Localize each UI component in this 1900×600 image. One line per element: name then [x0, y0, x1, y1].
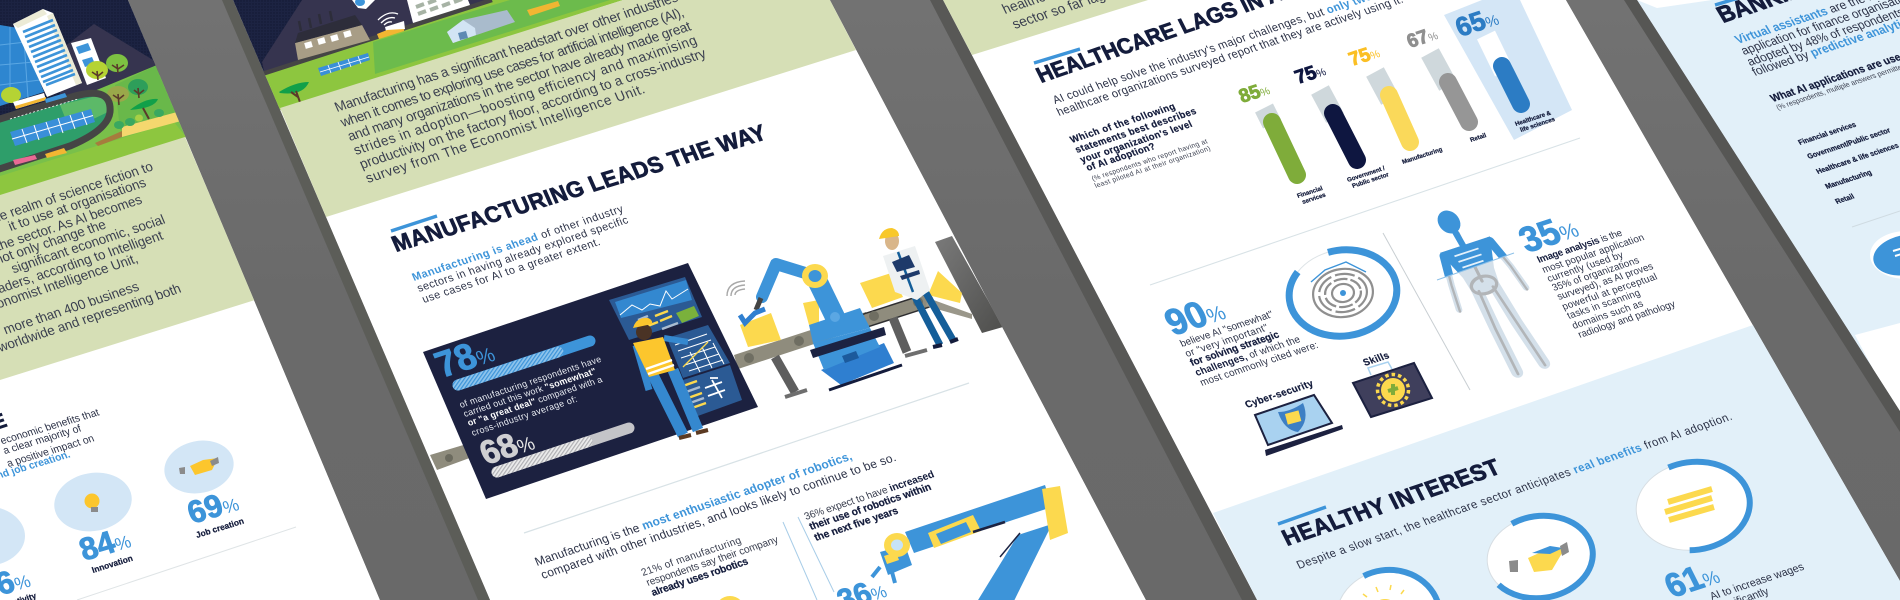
heading bar: [1278, 507, 1326, 524]
intro paragraph: survey from The Economist Intelligence Unit.: [363, 81, 647, 186]
tube: healthcare 65%: life sciences: [1519, 116, 1557, 134]
stat: innovation: Innovation: [90, 553, 134, 575]
stat 90% text: challenges, of which the: [1193, 334, 1303, 379]
night sky: [233, 0, 302, 74]
stat description: carried out this work "somewhat": [462, 366, 598, 419]
icon: laptop with shield: [1243, 378, 1343, 456]
trees: [1, 54, 164, 129]
heading bar: [391, 216, 437, 231]
grass: [262, 0, 623, 110]
stat: job creation: Job creation: [194, 516, 245, 540]
intro paragraph: productivity on the factory floor, according to a cross-industry: [357, 46, 708, 172]
heading bar: [1034, 49, 1080, 63]
robot head icon: [715, 596, 745, 600]
intro paragraph: strides in adoption—boosting efficiency and maximising: [351, 33, 699, 158]
stat 35% text: currently (used by: [1545, 250, 1625, 285]
stat 35% text: 35% of organizations: [1550, 255, 1641, 294]
tube: financial services 85%: [1236, 78, 1327, 206]
panel: sheet 4 banking: [1637, 0, 1900, 420]
grass: [0, 66, 186, 176]
intro text: Despite a slow start, the healthcare sector anticipates real benefits from AI adoption.: [1295, 411, 1734, 572]
tube: manufacturing 75%: Manufacturing: [1401, 146, 1444, 166]
pale intro band: [0, 137, 255, 380]
icon: briefcase with gear: Skills: [1361, 350, 1392, 369]
stat: job creation: 69%: [182, 482, 243, 531]
white buildings: [407, 0, 470, 23]
stat description: of manufacturing respondents have: [458, 354, 603, 410]
tree: [279, 82, 309, 102]
warehouse: [447, 10, 515, 43]
stat 90%: 90%: [1158, 288, 1231, 343]
icon: wifi: [378, 13, 398, 25]
callout: 21% use robotics: respondents say their company: [645, 534, 781, 589]
factory: [295, 11, 370, 60]
tube: financial services 85%: services: [1301, 191, 1327, 206]
test tube chart: [1236, 1, 1557, 206]
robot arm: large: [872, 485, 1068, 600]
intro paragraph: when it comes to exploring use cases for artificial intelligence (AI),: [337, 5, 686, 130]
chart question: Which of the following: [1068, 101, 1178, 146]
conveyor belt: [430, 297, 972, 470]
tube: government 75%: [1292, 59, 1391, 190]
panel: healthy interest: [1213, 325, 1900, 600]
intro paragraph: [0, 159, 183, 355]
road loop with solar farm: [0, 93, 110, 172]
sand path: [122, 112, 181, 137]
grey progress bar: [497, 428, 629, 472]
stat 35%: 35%: [1512, 206, 1584, 260]
chart note: least piloted AI at their organization): [1094, 145, 1212, 190]
icon: laptop with shield: Cyber-security: [1243, 378, 1316, 411]
night sky: [0, 0, 160, 120]
tube: government 75%: Government /: [1346, 165, 1386, 184]
tube: financial services 85%: Financial: [1296, 185, 1324, 200]
chart row labels: Manufacturing: [1823, 168, 1874, 191]
heading bar: [1715, 0, 1745, 5]
chart note: (% respondents who report having at: [1091, 138, 1209, 183]
stat 35% text: powerful at perceptual: [1560, 272, 1659, 313]
pale intro band: [280, 0, 856, 217]
icon: briefcase with gear: [1353, 350, 1432, 417]
stat 35% text: tasks in scanning: [1565, 288, 1642, 322]
tube: retail 67%: 67%: [1404, 23, 1441, 53]
section text: economic benefits that: [0, 407, 101, 447]
stat: job creation: [164, 440, 244, 538]
stat 35% text: surveyed), as AI proves: [1555, 261, 1655, 303]
chart row labels: Healthcare & life sciences: [1814, 141, 1900, 176]
speech bubble: [352, 0, 375, 9]
stat 90% text: believe AI "somewhat": [1178, 309, 1276, 350]
stat 90% text: [1178, 309, 1320, 389]
stat 90% text: for solving strategic: [1188, 329, 1282, 369]
tube: healthcare 65%: 65%: [1451, 1, 1503, 43]
intro fragment: [999, 0, 1187, 32]
intro text: Manufacturing is ahead of other industry: [410, 203, 626, 284]
callout: 36% expect increase: the next five years: [813, 506, 900, 544]
truck: [377, 21, 405, 39]
title: MANUFACTURING LEADS THE WAY: [388, 120, 770, 257]
yellow boxes: [740, 271, 962, 347]
panel: sheet 1 economic benefits: [0, 0, 380, 600]
icon: blue speech blob: [1870, 230, 1900, 280]
callout: 36% expect increase: 36% expect to have increased: [803, 469, 936, 523]
section text: [0, 407, 101, 483]
icon: wifi signal: [727, 281, 745, 296]
robotics text: Manufacturing is the most enthusiastic adopter of robotics,: [532, 449, 854, 569]
stat 35% text: domains such as: [1570, 299, 1645, 332]
intro paragraph: more than 400 business: [1, 279, 141, 337]
callout: 21% use robotics: already uses robotics: [650, 556, 750, 599]
panel: navy stats card: [423, 263, 758, 499]
machine housing: [935, 236, 1003, 333]
callout: 36% expect increase: their use of robotics within: [808, 482, 933, 533]
tube: government 75%: 75%: [1292, 59, 1329, 89]
title: HEALTHY INTEREST: [1277, 454, 1504, 551]
stat 90% text: or "very important": [1183, 322, 1271, 360]
engineer in lab coat: [879, 228, 958, 347]
bus: [527, 1, 560, 16]
tube: healthcare 65%: [1451, 1, 1557, 134]
section text: a clear majority of: [2, 423, 83, 457]
stat 35% text: radiology and pathology: [1576, 299, 1677, 341]
tube: healthcare 65%: Healthcare &: [1514, 109, 1553, 128]
solar panels: [318, 53, 370, 76]
ring: money: [1630, 454, 1756, 558]
chart question: [1068, 101, 1198, 174]
blue progress bar: [458, 341, 590, 385]
stat 90% text: most commonly cited were:: [1198, 340, 1320, 389]
tube: retail 67%: [1404, 23, 1488, 144]
road: [262, 0, 492, 74]
intro paragraph: worldwide and representing both: [0, 281, 183, 355]
stat: innovation: [54, 472, 133, 573]
chart row labels: Government/Public sector: [1805, 126, 1892, 161]
small building: [71, 38, 106, 85]
intro text: sectors in having already explored specific: [415, 214, 631, 295]
callout: 21% use robotics: 21% of manufacturing: [640, 535, 743, 579]
stat: innovation: 84%: [74, 519, 135, 568]
stat 35% text: [1535, 228, 1677, 341]
tube: retail 67%: Retail: [1469, 132, 1488, 144]
conveyor legs: [775, 318, 927, 397]
blue scanned upper body: [1414, 198, 1526, 310]
screens: [609, 277, 742, 417]
intro paragraph: significant economic, social: [9, 212, 167, 276]
chart question: of AI adoption?: [1084, 141, 1158, 174]
robotics text: compared with other industries, and looks likely to continue to be so.: [538, 450, 898, 582]
stat description: or "a great deal" compared with a: [466, 374, 604, 428]
section text: a positive impact on: [5, 433, 96, 470]
intro paragraph: [332, 0, 708, 186]
stat 78%: 78%: [428, 329, 500, 385]
panel highlight: healthcare tube: [1444, 0, 1572, 140]
stat description: cross-industry average of:: [470, 394, 579, 438]
worker in hi-vis vest: [633, 318, 708, 438]
ring: handshake: [1482, 509, 1598, 600]
glass tower: [0, 25, 44, 106]
illustration: skeleton scan: [1414, 198, 1562, 382]
tube: manufacturing 75%: [1346, 41, 1444, 166]
tube: financial services 85%: 85%: [1236, 78, 1273, 108]
intro paragraph: and many organizations in the sector have already made great: [345, 19, 693, 144]
ring: lightbulb: [1330, 563, 1446, 600]
mountain: [262, 0, 484, 71]
tube: government 75%: Public sector: [1351, 171, 1391, 190]
panel: sheet 2 manufacturing: [233, 0, 1146, 600]
chart question: your organization's level: [1078, 119, 1194, 166]
chart row labels: Financial services: [1796, 120, 1858, 147]
mountain: [60, 24, 156, 95]
stat 35% text: most popular application: [1540, 232, 1646, 276]
panel: sheet 3 healthcare: [943, 0, 1900, 600]
grey lower body: [1426, 221, 1562, 382]
stat description: [458, 354, 604, 438]
stat 35% text: Image analysis is the: [1535, 228, 1624, 266]
icon: maze ring: [1284, 243, 1402, 343]
chart question: statements best describes: [1073, 106, 1198, 156]
tube: manufacturing 75%: 75%: [1346, 41, 1383, 71]
robot arm: [740, 264, 902, 390]
chart row labels: [1796, 120, 1900, 206]
chart row labels: Retail: [1833, 192, 1856, 206]
intro paragraph: it to use at organisations: [6, 175, 148, 234]
intro text: use cases for AI to a greater extent.: [420, 236, 602, 306]
stat: productivity: [0, 506, 38, 600]
stat 68%: 68%: [474, 421, 540, 472]
striped tower: [13, 9, 82, 97]
